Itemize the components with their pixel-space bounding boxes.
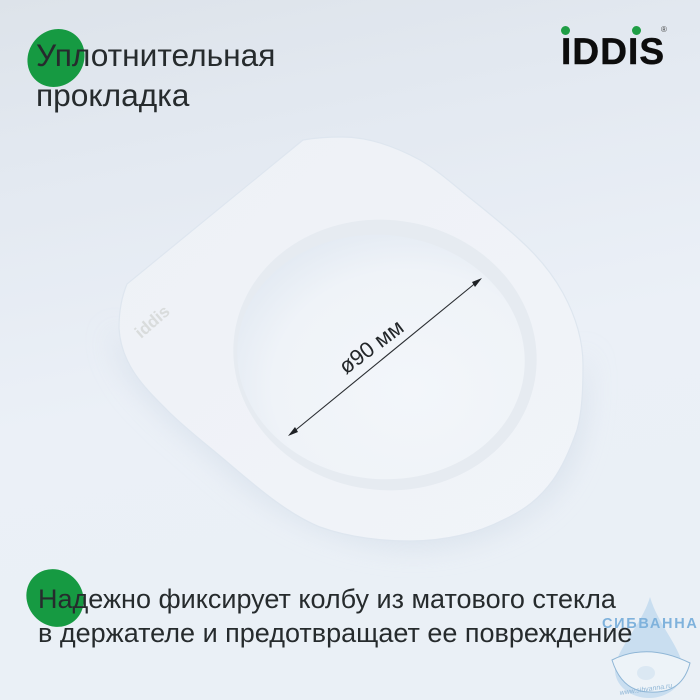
brand logo [561,25,667,72]
green accent blob: heading [16,17,96,99]
caption: Надежно фиксирует колбу из матового стекла [38,584,616,614]
dimension arrow [288,278,482,436]
gasket inner rim [216,200,554,510]
caption: в держателе и предотвращает ее повреждение [38,618,632,648]
watermark: Sibvanna drop and bath: www.sibvanna.ru [619,683,673,697]
registered mark: ® [661,25,667,34]
embossed logo on gasket: iddis [131,302,174,342]
logo wordmark: IDDIS [561,31,665,72]
heading: прокладка [36,77,189,113]
green accent blob: caption [14,557,96,639]
watermark: Sibvanna drop and bath [602,597,699,698]
heading [36,37,275,113]
dimension label: ø90 мм [334,314,408,379]
gasket shadow [112,330,587,548]
logo dot left [561,26,570,35]
logo dot right [632,26,641,35]
gasket hole [225,221,537,493]
watermark: Sibvanna drop and bath: СИБВАННА [602,616,699,632]
white sealing gasket [112,137,587,548]
heading: Уплотнительная [36,37,275,73]
caption [38,584,632,648]
gasket body [119,137,583,541]
